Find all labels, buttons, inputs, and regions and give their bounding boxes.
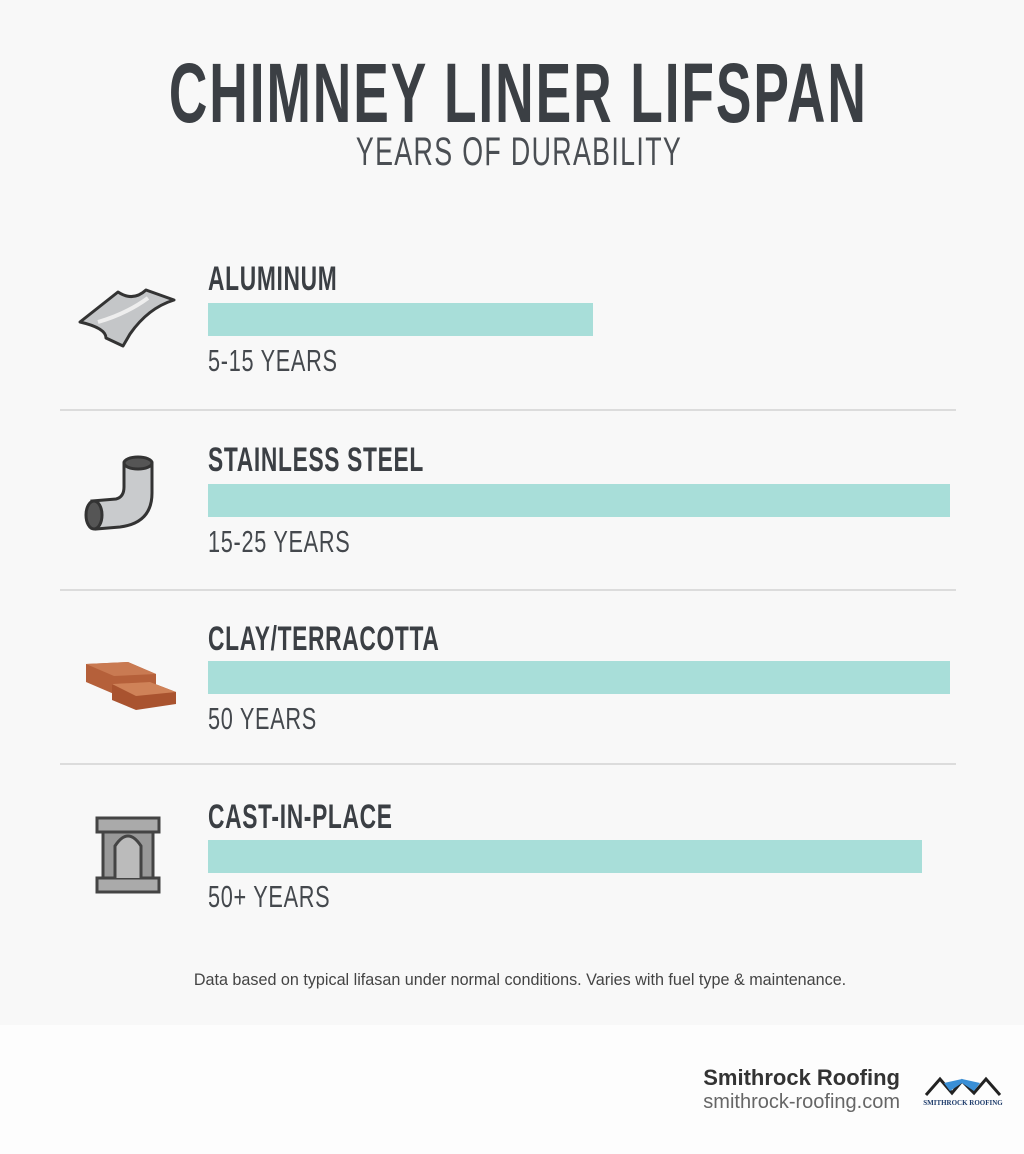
label: CAST-IN-PLACE xyxy=(208,798,393,836)
subtitle: YEARS OF DURABILITY xyxy=(356,130,682,174)
row: cast-in-place xyxy=(96,798,922,914)
brand text xyxy=(703,1065,900,1113)
bar xyxy=(208,840,922,873)
footer band xyxy=(0,1025,1024,1154)
icon: aluminum sheet xyxy=(78,288,176,348)
years: 15-25 YEARS xyxy=(208,524,350,559)
label: ALUMINUM xyxy=(208,260,337,298)
brand text: Smithrock Roofing xyxy=(703,1065,900,1090)
years: 50+ YEARS xyxy=(208,879,330,914)
logo: SMITHROCK ROOFING xyxy=(923,1099,1003,1107)
row: stainless steel xyxy=(84,441,950,559)
bar xyxy=(208,303,593,336)
years: 50 YEARS xyxy=(208,701,317,736)
years: 5-15 YEARS xyxy=(208,343,338,378)
icon: bricks xyxy=(86,662,176,710)
row: clay xyxy=(86,620,950,736)
row: aluminum xyxy=(78,260,593,378)
bar xyxy=(208,661,950,694)
title: CHIMNEY LINER LIFSPAN xyxy=(169,46,868,140)
logo xyxy=(923,1076,1003,1107)
icon: elbow pipe xyxy=(84,456,154,531)
label: CLAY/TERRACOTTA xyxy=(208,620,440,658)
icon: cast liner xyxy=(96,816,160,894)
brand text: smithrock-roofing.com xyxy=(703,1091,900,1113)
footnote: Data based on typical lifasan under normal conditions. Varies with fuel type & maintenance. xyxy=(194,970,846,989)
bar xyxy=(208,484,950,517)
label: STAINLESS STEEL xyxy=(208,441,424,479)
